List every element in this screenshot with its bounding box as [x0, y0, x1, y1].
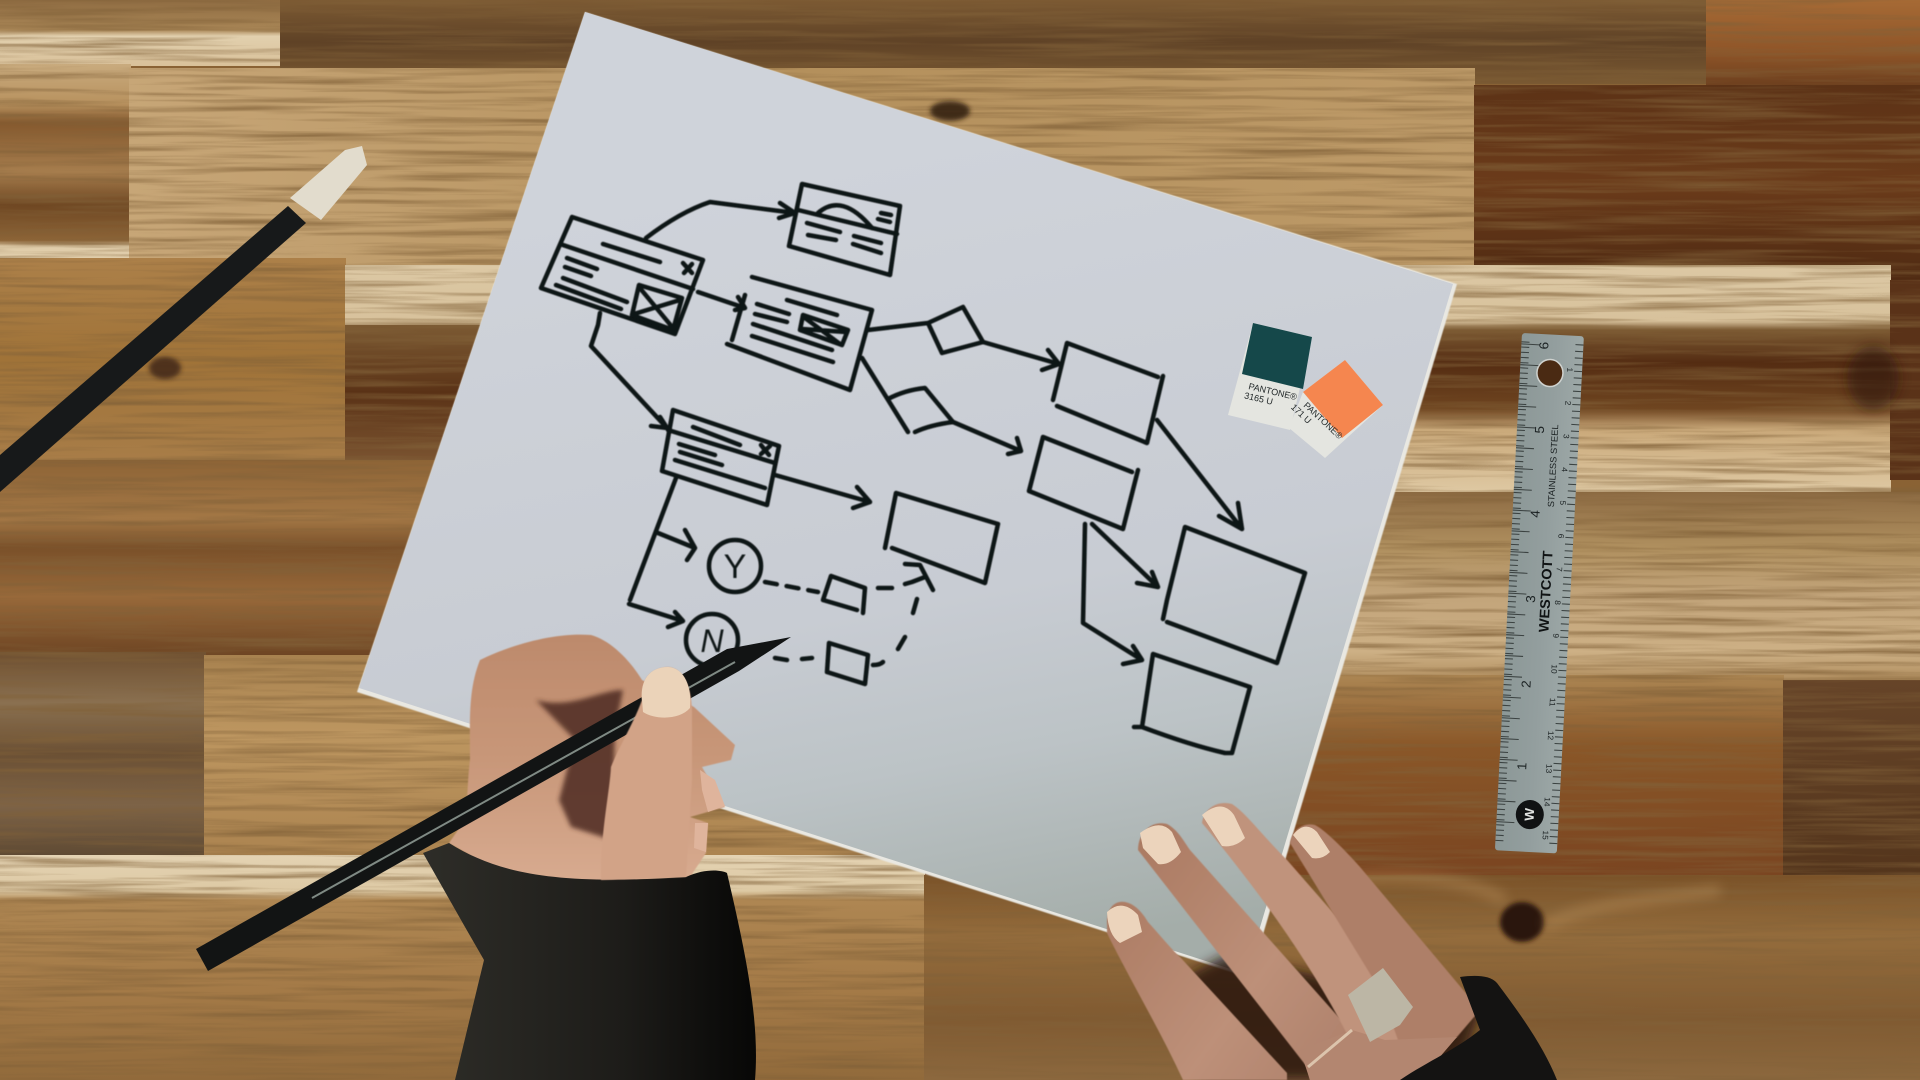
small box no	[827, 643, 868, 684]
inch numbers: 6	[1536, 341, 1551, 350]
steel ruler	[1495, 333, 1584, 853]
arrow to content wireframe	[698, 292, 745, 310]
centimetre numbers: 9	[1551, 633, 1560, 639]
centimetre numbers: 6	[1556, 533, 1565, 539]
arrow to box one	[983, 342, 1059, 370]
ruler brand: WESTCOTT	[1537, 550, 1557, 633]
centimetre numbers	[1541, 367, 1574, 840]
swatch label: 171 U	[1289, 402, 1313, 426]
no node: N	[700, 623, 724, 659]
small box yes	[823, 576, 865, 613]
sleeve cuff right	[1400, 976, 1557, 1080]
hand-drawn flowchart	[541, 184, 1305, 753]
silver band ring	[1348, 968, 1413, 1042]
inch numbers: 1	[1514, 762, 1529, 770]
inch numbers: 4	[1528, 510, 1543, 518]
shadow in fist	[536, 690, 623, 840]
dashed connector no	[775, 599, 917, 665]
middle finger	[1202, 803, 1420, 1075]
swatch label: PANTONE®	[1248, 381, 1298, 402]
index finger over pen	[601, 667, 692, 880]
centimetre numbers: 14	[1542, 797, 1552, 807]
sheet of paper	[357, 12, 1457, 978]
ruler hole	[1536, 359, 1564, 387]
nails	[1107, 806, 1330, 943]
decision diamond one	[868, 307, 983, 353]
ring finger	[1138, 823, 1360, 1080]
wireframe: main window	[541, 217, 703, 334]
centimetre numbers: 4	[1560, 467, 1569, 473]
ruler logo	[1515, 799, 1545, 830]
thumbnail	[642, 667, 690, 718]
box two	[1029, 437, 1138, 529]
finger nails behind	[694, 770, 725, 852]
little finger	[1107, 902, 1287, 1080]
swatch label: 3165 U	[1243, 390, 1274, 407]
pantone swatch orange	[1289, 360, 1383, 458]
branch yes and no lines	[629, 478, 695, 627]
large box	[1163, 527, 1305, 663]
drawing pen	[196, 637, 791, 971]
arrow to large box	[1157, 420, 1242, 529]
dashed connector yes	[765, 582, 818, 592]
pantone swatch dark teal	[1228, 323, 1312, 430]
pen resting top left	[0, 146, 367, 492]
centimetre numbers: 1	[1565, 367, 1574, 373]
elbow arrow to last box	[1083, 524, 1142, 664]
pen cap eraser end	[290, 146, 367, 220]
centimetre numbers: 12	[1546, 731, 1555, 741]
wireframe: content page	[727, 277, 872, 390]
inch numbers: 2	[1519, 680, 1534, 688]
centimetre numbers: 11	[1548, 698, 1557, 707]
inch numbers: 5	[1532, 426, 1547, 434]
knuckle palm	[1300, 1030, 1457, 1080]
thin gold ring	[1308, 1030, 1352, 1067]
box one	[1053, 343, 1163, 443]
index finger	[1290, 824, 1480, 1073]
yes node	[709, 540, 761, 592]
left hand writing with pen	[196, 635, 791, 1080]
arrow down to dialog wireframe	[591, 313, 667, 428]
last box	[1134, 654, 1250, 753]
right hand fingers on paper	[1107, 803, 1557, 1080]
ruler logo: W	[1522, 807, 1537, 821]
centimetre numbers: 8	[1553, 600, 1562, 606]
swatch label: PANTONE®	[1302, 400, 1345, 441]
arrow to box three	[775, 475, 870, 508]
inch numbers	[1514, 341, 1551, 770]
arrow from box two	[1092, 524, 1158, 587]
wireframe: hero page	[789, 184, 900, 275]
inch numbers: 3	[1523, 595, 1538, 603]
centimetre numbers: 13	[1544, 764, 1553, 774]
arrow to box two	[953, 422, 1021, 454]
centimetre numbers: 2	[1563, 401, 1572, 406]
centimetre numbers: 10	[1549, 664, 1559, 674]
centimetre numbers: 15	[1541, 830, 1550, 840]
arrow to hero wireframe	[646, 202, 795, 238]
centimetre numbers: 3	[1562, 434, 1571, 439]
yes node: Y	[724, 548, 746, 586]
centimetre numbers: 5	[1558, 500, 1567, 506]
box three	[885, 493, 998, 583]
sleeve cuff left	[423, 843, 756, 1080]
centimetre numbers: 7	[1555, 567, 1564, 572]
dashed connector into box three	[878, 564, 933, 590]
hand back and palm	[449, 635, 735, 883]
wireframe: dialog	[662, 410, 779, 505]
decision diamond two	[862, 358, 953, 432]
ruler material label: STAINLESS STEEL	[1546, 424, 1560, 508]
hand shadow	[1170, 955, 1480, 1080]
no node	[686, 614, 738, 666]
